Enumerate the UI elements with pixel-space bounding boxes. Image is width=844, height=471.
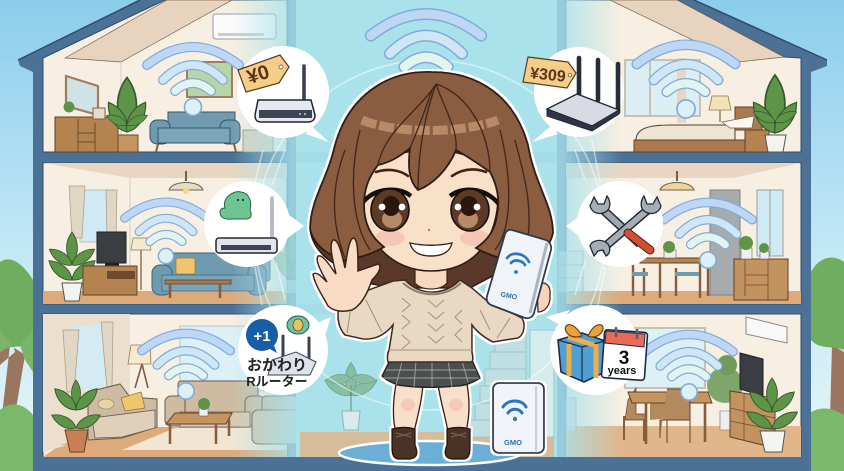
window [625, 58, 700, 123]
standing router: GMO [504, 438, 522, 447]
router [547, 94, 619, 131]
coffee table [166, 398, 232, 444]
smile [410, 243, 452, 256]
potted plants [663, 236, 769, 259]
room: lower left [43, 314, 302, 457]
face [362, 150, 498, 271]
plus one badge: +1 [253, 328, 271, 345]
caption [246, 357, 308, 389]
price tag: ¥309 [529, 65, 567, 86]
plant [103, 78, 151, 152]
tree right [811, 258, 844, 471]
left eye [360, 189, 411, 231]
wifi icon: lower left [142, 333, 230, 399]
room: upper left [43, 0, 287, 152]
plant [46, 232, 98, 301]
room: lower right [566, 314, 801, 457]
signal rings [255, 60, 605, 410]
caption: Rルーター [246, 374, 308, 389]
air conditioner [746, 317, 787, 343]
leaf coin [287, 316, 309, 334]
held router [487, 230, 551, 318]
sofa [152, 253, 270, 295]
sofa [150, 112, 240, 152]
sweater [338, 280, 524, 362]
staircase [470, 330, 554, 437]
floor disc [339, 441, 521, 465]
plaid skirt [382, 360, 480, 387]
dresser [55, 102, 118, 152]
dining table [632, 258, 708, 298]
antennas [579, 58, 618, 112]
character [310, 72, 553, 459]
potted plant [744, 378, 800, 452]
cabinet [734, 259, 788, 300]
plant with pot [49, 380, 103, 452]
standing router [493, 383, 544, 453]
wifi icon: middle right [664, 202, 752, 268]
bubble: monthly plan router [523, 47, 624, 142]
calendar: 3 [619, 348, 629, 369]
floor lamp [131, 238, 151, 290]
caption: おかわり [247, 357, 307, 374]
picture frame [187, 62, 232, 97]
wrench icon [590, 196, 661, 256]
background plant [707, 355, 743, 430]
waving hand [313, 238, 380, 311]
held router: GMO [500, 291, 518, 302]
blush [375, 230, 490, 246]
air conditioner [213, 14, 276, 39]
boots [392, 428, 470, 459]
bedside lamp [709, 96, 731, 122]
room: middle left [43, 163, 315, 304]
window [757, 190, 783, 256]
tv stand [83, 266, 137, 295]
mirror [66, 76, 98, 115]
window frame [625, 328, 705, 388]
wifi icon: upper right [637, 45, 735, 118]
back hair [310, 72, 553, 288]
hall plant [322, 362, 380, 430]
nightstand [745, 130, 769, 152]
router [255, 66, 315, 122]
legs [393, 384, 469, 432]
wifi icon: top centre [371, 14, 481, 96]
eyebrows [376, 169, 486, 176]
hair strands [334, 84, 529, 258]
tv cabinet [730, 391, 775, 448]
bubble: cashback mascot router [204, 181, 304, 267]
hair highlight [362, 120, 498, 130]
nose [428, 229, 430, 231]
room: middle right [558, 163, 801, 304]
refrigerator [710, 190, 740, 295]
bed [634, 107, 762, 152]
dining set [624, 388, 712, 444]
rug [122, 428, 287, 450]
wifi mark [507, 254, 529, 274]
neck [415, 265, 447, 289]
gift box [558, 325, 605, 382]
ceiling lamp [660, 171, 694, 190]
armchair [252, 396, 302, 444]
calendar [601, 328, 648, 380]
front hair [310, 72, 553, 262]
ceiling lamp [169, 171, 203, 194]
calendar: years [608, 365, 636, 377]
bubble: tools support [566, 181, 663, 267]
floor lamp [128, 345, 151, 388]
sofa right [165, 381, 265, 427]
bubble: free router [237, 46, 329, 142]
central hall [232, 0, 622, 457]
trash bin [566, 398, 576, 432]
lower floor strip [33, 457, 811, 471]
router [268, 336, 316, 375]
bubble: extra router [238, 305, 331, 395]
green mascot [220, 192, 251, 219]
right eye [450, 189, 501, 231]
filing drawer [558, 251, 583, 292]
wifi icon: lower right [645, 334, 733, 400]
plant [748, 75, 802, 152]
hall floor [300, 432, 554, 457]
window and curtains [69, 186, 117, 242]
router [216, 198, 277, 253]
screwdriver handle [628, 233, 650, 250]
window and curtains [63, 322, 287, 395]
bubble: gift and three years [546, 305, 648, 395]
room: upper right [566, 0, 802, 152]
sofa left [88, 384, 157, 440]
tree left [0, 259, 33, 471]
television [97, 232, 126, 266]
wifi icon: middle left [125, 202, 207, 264]
side drawer [243, 130, 273, 152]
television [740, 353, 763, 396]
coffee table [165, 280, 231, 298]
plant faded [269, 234, 315, 293]
price tag: ¥0 [244, 61, 272, 89]
wifi icon: upper left [147, 47, 239, 116]
